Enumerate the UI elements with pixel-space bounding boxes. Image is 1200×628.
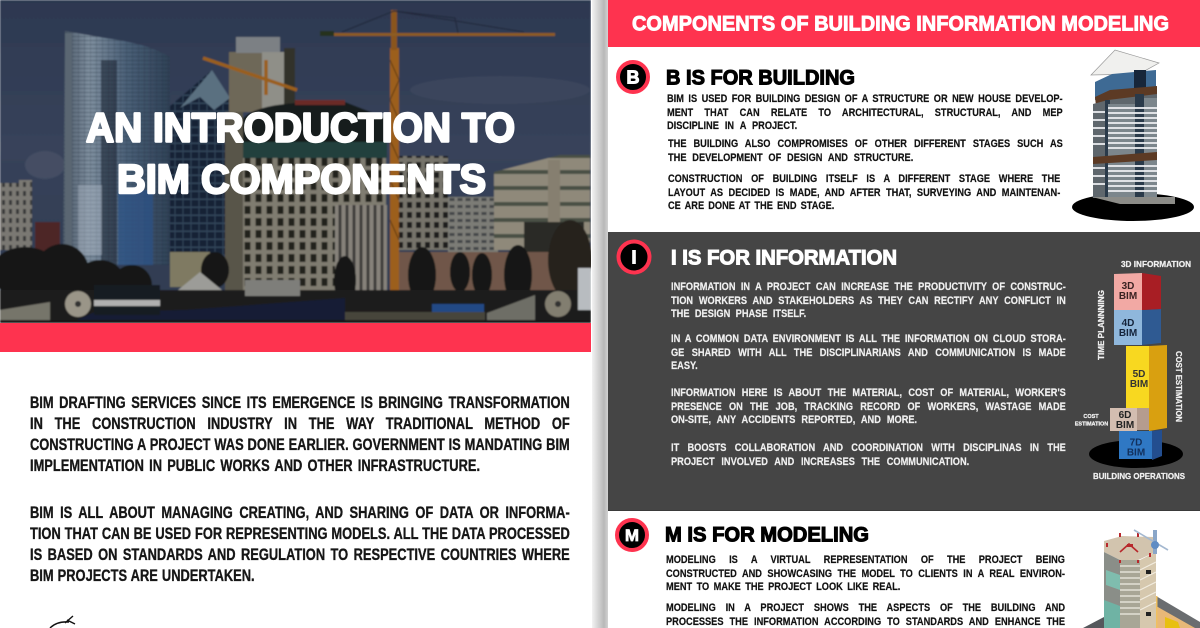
badge I: I [631, 248, 636, 268]
paragraph: what BIM drafting brings: IN THE CONSTRUCTION INDUSTRY IN THE WAY TRADITIONAL METHOD OF [30, 415, 570, 433]
text B2: THE DEVELOPMENT OF DESIGN AND STRUCTURE. [668, 152, 913, 164]
text I3: INFORMATION HERE IS ABOUT THE MATERIAL, COST OF MATERIAL, WORKER'S [671, 387, 1066, 399]
heading M: M IS FOR MODELING [665, 524, 869, 546]
text M2: PROCESSES THE INFORMATION ACCORDING TO STANDARDS AND ENHANCE THE [666, 616, 1065, 628]
text I2: EASY. [671, 360, 698, 372]
right beige building [494, 155, 590, 250]
panel: hero photo with title [0, 0, 591, 323]
paragraph: what BIM drafting brings: CONSTRUCTING A PROJECT WAS DONE EARLIER. GOVERNMENT IS MANDATING BIM [30, 436, 570, 454]
panel: I is for information [608, 232, 1200, 510]
text I3: PRESENCE ON THE JOB, TRACKING RECORD OF WORKERS, WASTAGE MADE [671, 400, 1066, 412]
heading B: B IS FOR BUILDING [666, 66, 855, 90]
chart: BIM dimensions stack [1075, 259, 1191, 481]
3D block: BIM [1119, 291, 1137, 302]
sky [0, 0, 591, 323]
text B3: CONSTRUCTION OF BUILDING ITSELF IS A DIFFERENT STAGE WHERE THE [668, 173, 1060, 185]
header title: COMPONENTS OF BUILDING INFORMATION MODELING [632, 12, 1169, 36]
4D block [1114, 309, 1161, 345]
illustration: BIM building cutaway [1083, 529, 1200, 628]
badge B: B [626, 68, 640, 88]
paragraph: what BIM drafting brings: IMPLEMENTATION IN PUBLIC WORKS AND OTHER INFRASTRUCTURE. [30, 457, 480, 475]
pointed tower [170, 70, 230, 255]
labels: COST [1083, 414, 1099, 420]
text M1 [666, 554, 1065, 593]
text M2 [666, 602, 1065, 628]
text B3 [668, 173, 1060, 212]
heading I: I IS FOR INFORMATION [671, 246, 897, 270]
text M1: MENT TO MAKE THE PROJECT LOOK LIKE REAL. [666, 581, 900, 593]
text I1 [671, 281, 1066, 320]
text B3: LAYOUT AS DECIDED IS MADE, AND AFTER THAT, SURVEYING AND MAINTENAN- [668, 186, 1060, 198]
text M1: MODELING IS A VIRTUAL REPRESENTATION OF THE PROJECT BEING [666, 554, 1065, 566]
red band under photo [0, 323, 591, 352]
site vehicle [1165, 617, 1180, 628]
text B3: CE ARE DONE AT THE END STAGE. [668, 200, 834, 212]
paragraph: what BIM is about [30, 504, 570, 585]
6D block: 6D [1119, 410, 1131, 421]
text I2 [671, 333, 1066, 372]
text I4: PROJECT INVOLVED AND INCREASES THE COMMUNICATION. [671, 456, 969, 468]
5D block: 5D [1133, 369, 1145, 380]
photo scene [0, 0, 592, 323]
text B1: MENT THAT CAN RELATE TO ARCHITECTURAL, STRUCTURAL, AND MEP [667, 106, 1063, 118]
text M2: MODELING IN A PROJECT SHOWS THE ASPECTS OF THE BUILDING AND [666, 602, 1065, 614]
paragraph: what BIM is about: BIM IS ALL ABOUT MANAGING CREATING, AND SHARING OF DATA OR INFORMA- [30, 504, 570, 522]
paragraph: what BIM is about: BIM PROJECTS ARE UNDERTAKEN. [30, 567, 255, 585]
badge M [615, 518, 649, 552]
badge I [616, 240, 652, 274]
text M1: CONSTRUCTED AND SHOWCASING THE MODEL TO CLIENTS IN A REAL ENVIRON- [666, 568, 1065, 580]
paragraph: what BIM drafting brings: BIM DRAFTING SERVICES SINCE ITS EMERGENCE IS BRINGING TRANSFORMATION [30, 394, 570, 412]
4D block: 4D [1122, 318, 1134, 329]
panel: M is for modeling [608, 510, 1200, 628]
labels: ESTIMATION [1075, 422, 1108, 428]
5D block: BIM [1130, 379, 1148, 390]
main round building [241, 102, 386, 155]
title: AN INTRODUCTION TO [86, 104, 515, 150]
badge B [616, 60, 650, 94]
right grid building [398, 156, 448, 250]
text I2: GE SHARED WITH ALL THE DISCIPLINARIANS AND COMMUNICATION IS MADE [671, 346, 1066, 358]
text B1 [667, 93, 1063, 132]
text I3: ON-SITE, ANY ACCIDENTS REPORTED, AND MORE. [671, 414, 917, 426]
paragraph: what BIM drafting brings [30, 394, 570, 475]
panel: B is for building [616, 60, 1063, 212]
logo fragment [50, 616, 76, 628]
paragraph: what BIM is about: IS BASED ON STANDARDS AND REGULATION TO RESPECTIVE COUNTRIES WHERE [30, 546, 570, 564]
illustration: tower on black disc [1072, 50, 1194, 221]
labels: COST ESTIMATION [1174, 351, 1184, 422]
intro text [30, 394, 570, 585]
beige tower [229, 52, 283, 112]
text I2: IN A COMMON DATA ENVIRONMENT IS ALL THE INFORMATION ON CLOUD STORA- [671, 333, 1066, 345]
text I3 [671, 387, 1066, 426]
7D block: BIM [1127, 448, 1145, 458]
text I1: TION WORKERS AND STAKEHOLDERS AS THEY CAN RECTIFY ANY CONFLICT IN [671, 294, 1066, 306]
crane [320, 10, 555, 293]
6D block: BIM [1116, 420, 1134, 431]
text I1: THE DESIGN PHASE ITSELF. [671, 308, 806, 320]
4D block: BIM [1119, 328, 1137, 339]
text I4: IT BOOSTS COLLABORATION AND COORDINATION WITH DISCIPLINAS IN THE [671, 442, 1066, 454]
glass tower [63, 31, 170, 265]
title: BIM COMPONENTS [117, 156, 486, 202]
7D block [1119, 430, 1162, 460]
harbour boats [0, 290, 591, 323]
text B2 [668, 138, 1063, 164]
3D block [1114, 273, 1161, 310]
labels: 3D INFORMATION [1121, 259, 1191, 269]
tree line [0, 220, 592, 305]
text B1: BIM IS USED FOR BUILDING DESIGN OF A STRUCTURE OR NEW HOUSE DEVELOP- [667, 93, 1063, 105]
low pink buildings and beige block [398, 252, 578, 294]
7D block: 7D [1130, 438, 1142, 448]
paragraph: what BIM is about: TION THAT CAN BE USED FOR REPRESENTING MODELS. ALL THE DATA PROCESSED [30, 525, 570, 543]
badge M: M [625, 526, 639, 545]
3D block: 3D [1122, 281, 1134, 292]
background crane [203, 58, 297, 95]
text I4 [671, 442, 1066, 468]
labels [1075, 259, 1191, 481]
5D block [1126, 345, 1167, 431]
text B1: DISCIPLINE IN A PROJECT. [667, 120, 797, 132]
centre shadow divider [592, 0, 608, 628]
text B2: THE BUILDING ALSO COMPROMISES OF OTHER DIFFERENT STAGES SUCH AS [668, 138, 1063, 150]
site crane [1134, 530, 1168, 554]
text I1: INFORMATION IN A PROJECT CAN INCREASE THE PRODUCTIVITY OF CONSTRUC- [671, 281, 1066, 293]
labels: BUILDING OPERATIONS [1093, 471, 1185, 481]
left building [0, 180, 32, 250]
header band [608, 0, 1200, 47]
title [86, 104, 515, 202]
6D block [1110, 408, 1149, 431]
labels: TIME PLANNNING [1096, 290, 1106, 360]
